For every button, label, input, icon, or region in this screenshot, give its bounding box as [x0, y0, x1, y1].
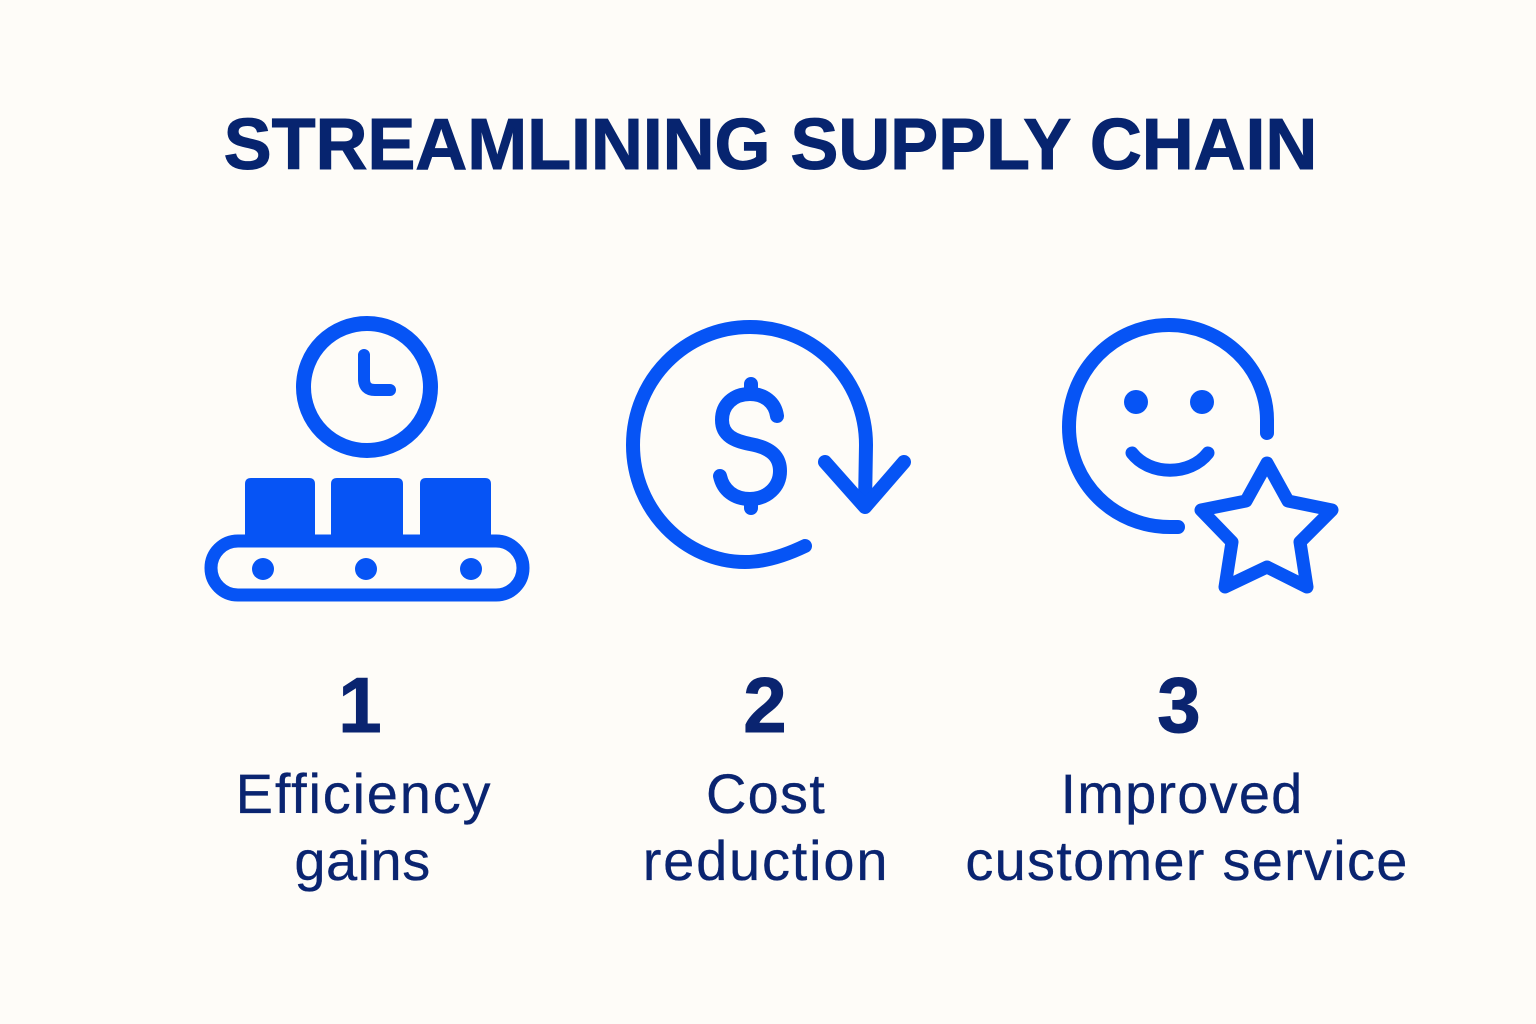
icon: clock over conveyor belt	[211, 324, 523, 595]
label: cost reduction: Cost	[706, 762, 826, 825]
number 3: 3	[1157, 661, 1201, 749]
icon: dollar with circular arrow	[633, 327, 904, 562]
label: cost reduction	[643, 762, 889, 892]
title: STREAMLINING SUPPLY CHAIN	[224, 105, 1317, 185]
label: cost reduction: reduction	[643, 829, 889, 892]
label: improved customer service: Improved	[1060, 762, 1304, 825]
label: efficiency gains: Efficiency	[236, 762, 492, 825]
icon: smiley with star	[1069, 325, 1332, 587]
label: improved customer service	[965, 762, 1409, 892]
label: efficiency gains	[236, 762, 492, 892]
number 2: 2	[743, 661, 787, 749]
label: efficiency gains: gains	[294, 829, 431, 892]
label: improved customer service: customer service	[965, 829, 1409, 892]
number 1: 1	[338, 661, 382, 749]
